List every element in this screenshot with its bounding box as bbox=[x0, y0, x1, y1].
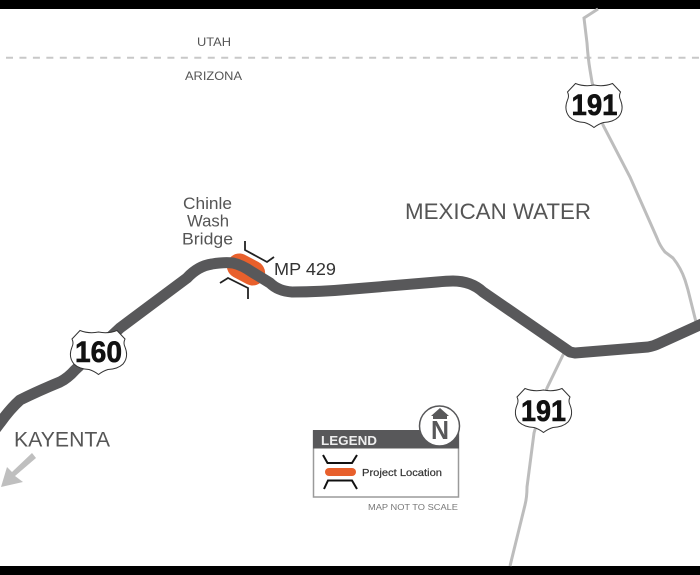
bottom border bbox=[0, 566, 700, 575]
label: Utah: UTAH bbox=[197, 35, 231, 49]
road: US 191 south bbox=[510, 347, 567, 566]
shield: US 191 south bbox=[515, 388, 572, 432]
label: Chinle Wash Bridge: Chinle bbox=[183, 194, 232, 213]
shield: US 160 bbox=[70, 330, 127, 374]
label: MP 429: MP 429 bbox=[274, 259, 336, 279]
arrow: to Kayenta bbox=[1, 453, 36, 487]
legend item label: Project Location bbox=[362, 467, 442, 479]
shield: US 191 south: 191 bbox=[521, 395, 566, 428]
bridge symbol bbox=[220, 241, 274, 299]
label: Mexican Water: MEXICAN WATER bbox=[405, 199, 591, 224]
project location marker bbox=[222, 249, 270, 290]
label: Chinle Wash Bridge: Wash bbox=[187, 212, 229, 230]
legend bbox=[313, 406, 460, 497]
label: Chinle Wash Bridge: Bridge bbox=[182, 230, 233, 248]
map scale note: MAP NOT TO SCALE bbox=[368, 502, 458, 512]
north arrow bbox=[420, 406, 460, 446]
state boundary line bbox=[6, 57, 700, 59]
shield: US 191 north bbox=[566, 84, 622, 128]
label: Chinle Wash Bridge bbox=[182, 194, 233, 248]
legend header bbox=[313, 430, 459, 448]
legend symbol bbox=[323, 455, 357, 489]
label: Kayenta: KAYENTA bbox=[14, 428, 111, 452]
road: US 160 bbox=[0, 263, 700, 431]
shield: US 160: 160 bbox=[75, 336, 122, 369]
legend title: LEGEND bbox=[321, 434, 377, 448]
label: Arizona: ARIZONA bbox=[185, 69, 242, 83]
shield: US 191 north: 191 bbox=[572, 89, 618, 122]
road: US 191 north bbox=[584, 9, 696, 322]
north arrow: N bbox=[431, 415, 449, 445]
top border bbox=[0, 0, 700, 9]
